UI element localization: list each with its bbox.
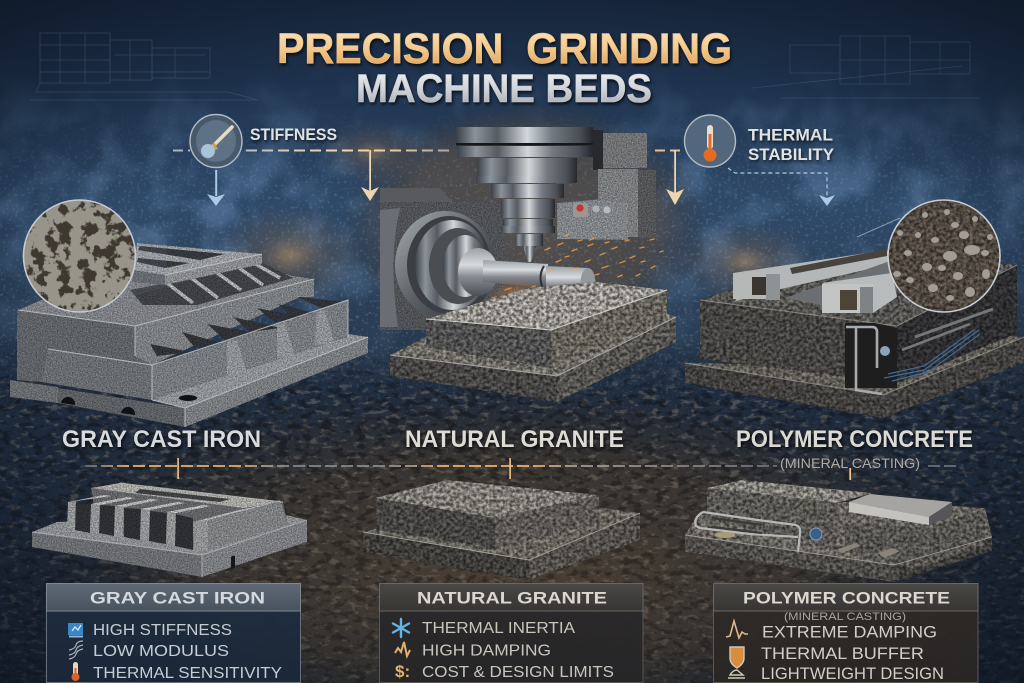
- cast iron bed lower: [32, 483, 307, 577]
- connector line: [85, 458, 960, 480]
- leader: [117, 218, 167, 300]
- mid ribs: [167, 262, 280, 303]
- linear rails: [733, 249, 897, 313]
- list item: THERMAL INERTIA: [422, 620, 575, 637]
- panel: polymer concrete: [714, 584, 978, 683]
- bright edges: [18, 254, 368, 427]
- panel heading: GRAY CAST IRON: [90, 588, 265, 608]
- rails: [849, 494, 952, 525]
- panel subheading: (MINERAL CASTING): [784, 611, 906, 623]
- thermal stability callout: STABILITY: [748, 145, 835, 164]
- panel: natural granite: [380, 584, 643, 682]
- list item: HIGH STIFFNESS: [93, 622, 232, 639]
- rib tops: [68, 495, 211, 513]
- lens: polymer aggregate: [857, 200, 1000, 312]
- plumbing: [845, 309, 993, 394]
- base slab: [390, 307, 676, 402]
- panel header: [380, 584, 643, 611]
- blue arrow: [728, 168, 835, 206]
- title: [277, 25, 732, 111]
- rib floor: [130, 262, 293, 305]
- concrete body: [685, 255, 1024, 418]
- rib fronts: [67, 501, 176, 545]
- label: THERMAL: [748, 126, 833, 145]
- spindle stack: [456, 127, 593, 262]
- label: STIFFNESS: [250, 125, 337, 144]
- blue arrow: [207, 170, 225, 206]
- icon: vibration wave: [726, 621, 748, 638]
- lens: cast iron microstructure: [20, 197, 140, 317]
- mounting holes: [61, 395, 197, 415]
- panel header: [714, 584, 978, 611]
- section label: natural granite: NATURAL GRANITE: [405, 426, 624, 453]
- panel heading: NATURAL GRANITE: [417, 588, 607, 608]
- chuck: [395, 211, 498, 319]
- icon: shield: [730, 647, 744, 668]
- granite bed lower: [363, 480, 640, 580]
- orange arrow: [666, 150, 684, 205]
- icon: dollar: $:: [395, 662, 410, 681]
- icon: thermometer: [72, 662, 80, 681]
- section label: polymer concrete: POLYMER CONCRETE: [736, 426, 973, 453]
- dashed line: [173, 150, 450, 152]
- title line 2: MACHINE BEDS: [356, 67, 652, 111]
- granite bed upper: [390, 282, 676, 402]
- control buttons: [576, 204, 611, 214]
- list item: THERMAL SENSITIVITY: [93, 665, 282, 682]
- sparks: [492, 234, 663, 312]
- list item: LIGHTWEIGHT DESIGN: [761, 665, 944, 683]
- gussets: [227, 310, 334, 376]
- end block: [193, 520, 208, 552]
- central grinding machine: [380, 127, 663, 330]
- upper block: [18, 262, 314, 365]
- workpiece shaft: [483, 260, 596, 298]
- upper block: [426, 282, 667, 368]
- bolts: [838, 543, 900, 558]
- gray cast iron bed upper: [10, 197, 368, 427]
- thermal stability callout: [655, 115, 835, 206]
- panel: gray cast iron: [46, 584, 300, 682]
- icon: damping wave: [395, 642, 410, 656]
- list item: EXTREME DAMPING: [762, 624, 937, 642]
- dashed line: [655, 150, 685, 152]
- polymer concrete bed upper: [685, 200, 1024, 418]
- icon: modulus: [69, 641, 83, 659]
- blueprint sketch left: [30, 33, 258, 100]
- list item: COST & DESIGN LIMITS: [422, 664, 614, 681]
- icon: lightweight: [728, 670, 745, 678]
- pockets: [150, 297, 343, 356]
- lower tier: [17, 300, 348, 400]
- icon: snowflake: [393, 619, 409, 637]
- iron body: [10, 243, 368, 427]
- icon: gauge and wrench: [190, 114, 242, 168]
- plumbing: [695, 512, 822, 552]
- panel heading: POLYMER CONCRETE: [743, 588, 950, 608]
- back bar: [91, 483, 288, 550]
- orange arrow: [361, 150, 379, 201]
- list item: THERMAL BUFFER: [761, 645, 924, 663]
- panel header: [46, 584, 300, 611]
- section sublabel: mineral casting: (MINERAL CASTING): [780, 455, 920, 471]
- spark glow: [488, 278, 548, 314]
- base plate: [32, 514, 307, 577]
- blueprint sketch right: [752, 36, 980, 98]
- stiffness callout: [173, 114, 450, 206]
- icon: stiffness: [68, 623, 83, 638]
- rib gaps: [75, 503, 193, 550]
- list item: LOW MODULUS: [93, 643, 229, 660]
- flange: [10, 334, 368, 427]
- list item: HIGH DAMPING: [422, 642, 551, 660]
- section label: gray cast iron: GRAY CAST IRON: [62, 426, 261, 453]
- icon: thermometer: [684, 115, 736, 167]
- title line 1: PRECISION GRINDING: [277, 25, 732, 73]
- leader: [857, 218, 900, 237]
- control box: [557, 130, 656, 240]
- polymer bed lower: [685, 480, 992, 582]
- spindle housing: [380, 188, 505, 330]
- top frame: [133, 243, 262, 275]
